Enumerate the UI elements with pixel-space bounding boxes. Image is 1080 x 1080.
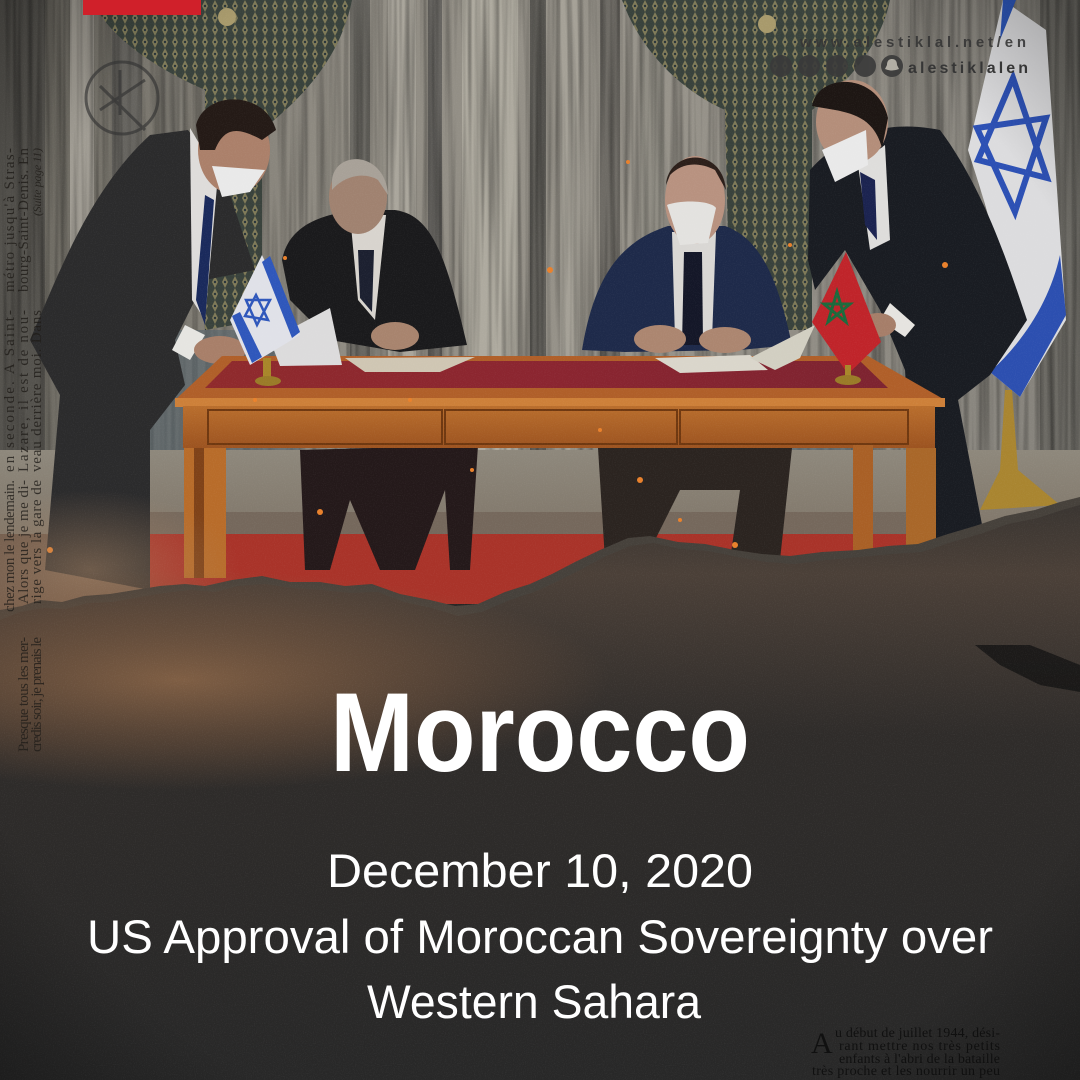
newspaper text bottom right [811,1026,1000,1079]
floor [0,450,1080,540]
newspaper strip left: Alors que je me di- [16,480,32,604]
man far right [808,80,1027,545]
seated man left [282,159,478,570]
date line: December 10, 2020 [327,844,753,897]
photo: signing ceremony [0,0,1080,650]
newspaper text bottom right: rant mettre nos très petits [839,1039,1000,1054]
social handle: alestiklalen [908,60,1028,77]
newspaper text bottom right: enfants à l'abri de la bataille [839,1052,1000,1067]
newspaper strip left: credis soir, je prenais le [29,637,45,752]
newspaper strip left: métro jusqu'à Stras- [2,148,18,292]
far right man head [816,80,888,164]
round calligraphy logo [86,62,158,134]
subtitle line two: Western Sahara [367,975,702,1028]
newspaper strip left: rige vers la gare de [29,480,45,604]
torn dark paper with text background [0,505,1080,1080]
newspaper text bottom right: A [811,1027,833,1060]
man far left [30,99,276,590]
newspaper strip left: bourg-Saint-Denis. En [16,148,32,292]
newspaper text bottom right: u début de juillet 1944, dési- [835,1026,1000,1041]
newspaper strip left [2,148,45,752]
curtains right [622,0,890,472]
paper tear mark right [975,645,1080,692]
seated man right [582,156,792,570]
subtitle line one: US Approval of Moroccan Sovereignty over [87,910,993,963]
newspaper strip left: Lazare, il est de nou- [16,310,32,472]
red carpet [145,534,920,604]
rug border [140,512,930,534]
newspaper strip left: (Suite page 11) [30,148,44,216]
small moroccan desk flag [812,252,881,385]
title: Morocco [330,670,750,795]
newspaper strip left: chez mon le lendemain. [2,480,18,612]
warm haze at lower left [0,490,240,650]
newspaper text bottom right: très proche et les nourrir un peu [812,1064,1000,1079]
newspaper strip left: Presque tous les mer- [16,637,32,752]
red tab top [83,0,201,15]
small israeli desk flag [230,255,300,386]
sparks [47,160,948,553]
newspaper strip left: veau derrière moi. Dans [29,310,45,472]
newspaper strip left: en seconde. A Saint- [2,310,18,472]
warm brown glow on torn paper [0,570,610,790]
torn paper fibre edge [0,497,1080,640]
social icons [770,55,903,77]
israeli flag on pole, right [968,0,1066,510]
website url: www.alestiklal.net/en [799,34,1026,51]
table [175,356,945,578]
wall with striped panels [0,0,1080,480]
documents [270,308,815,373]
curtains left [92,0,352,474]
